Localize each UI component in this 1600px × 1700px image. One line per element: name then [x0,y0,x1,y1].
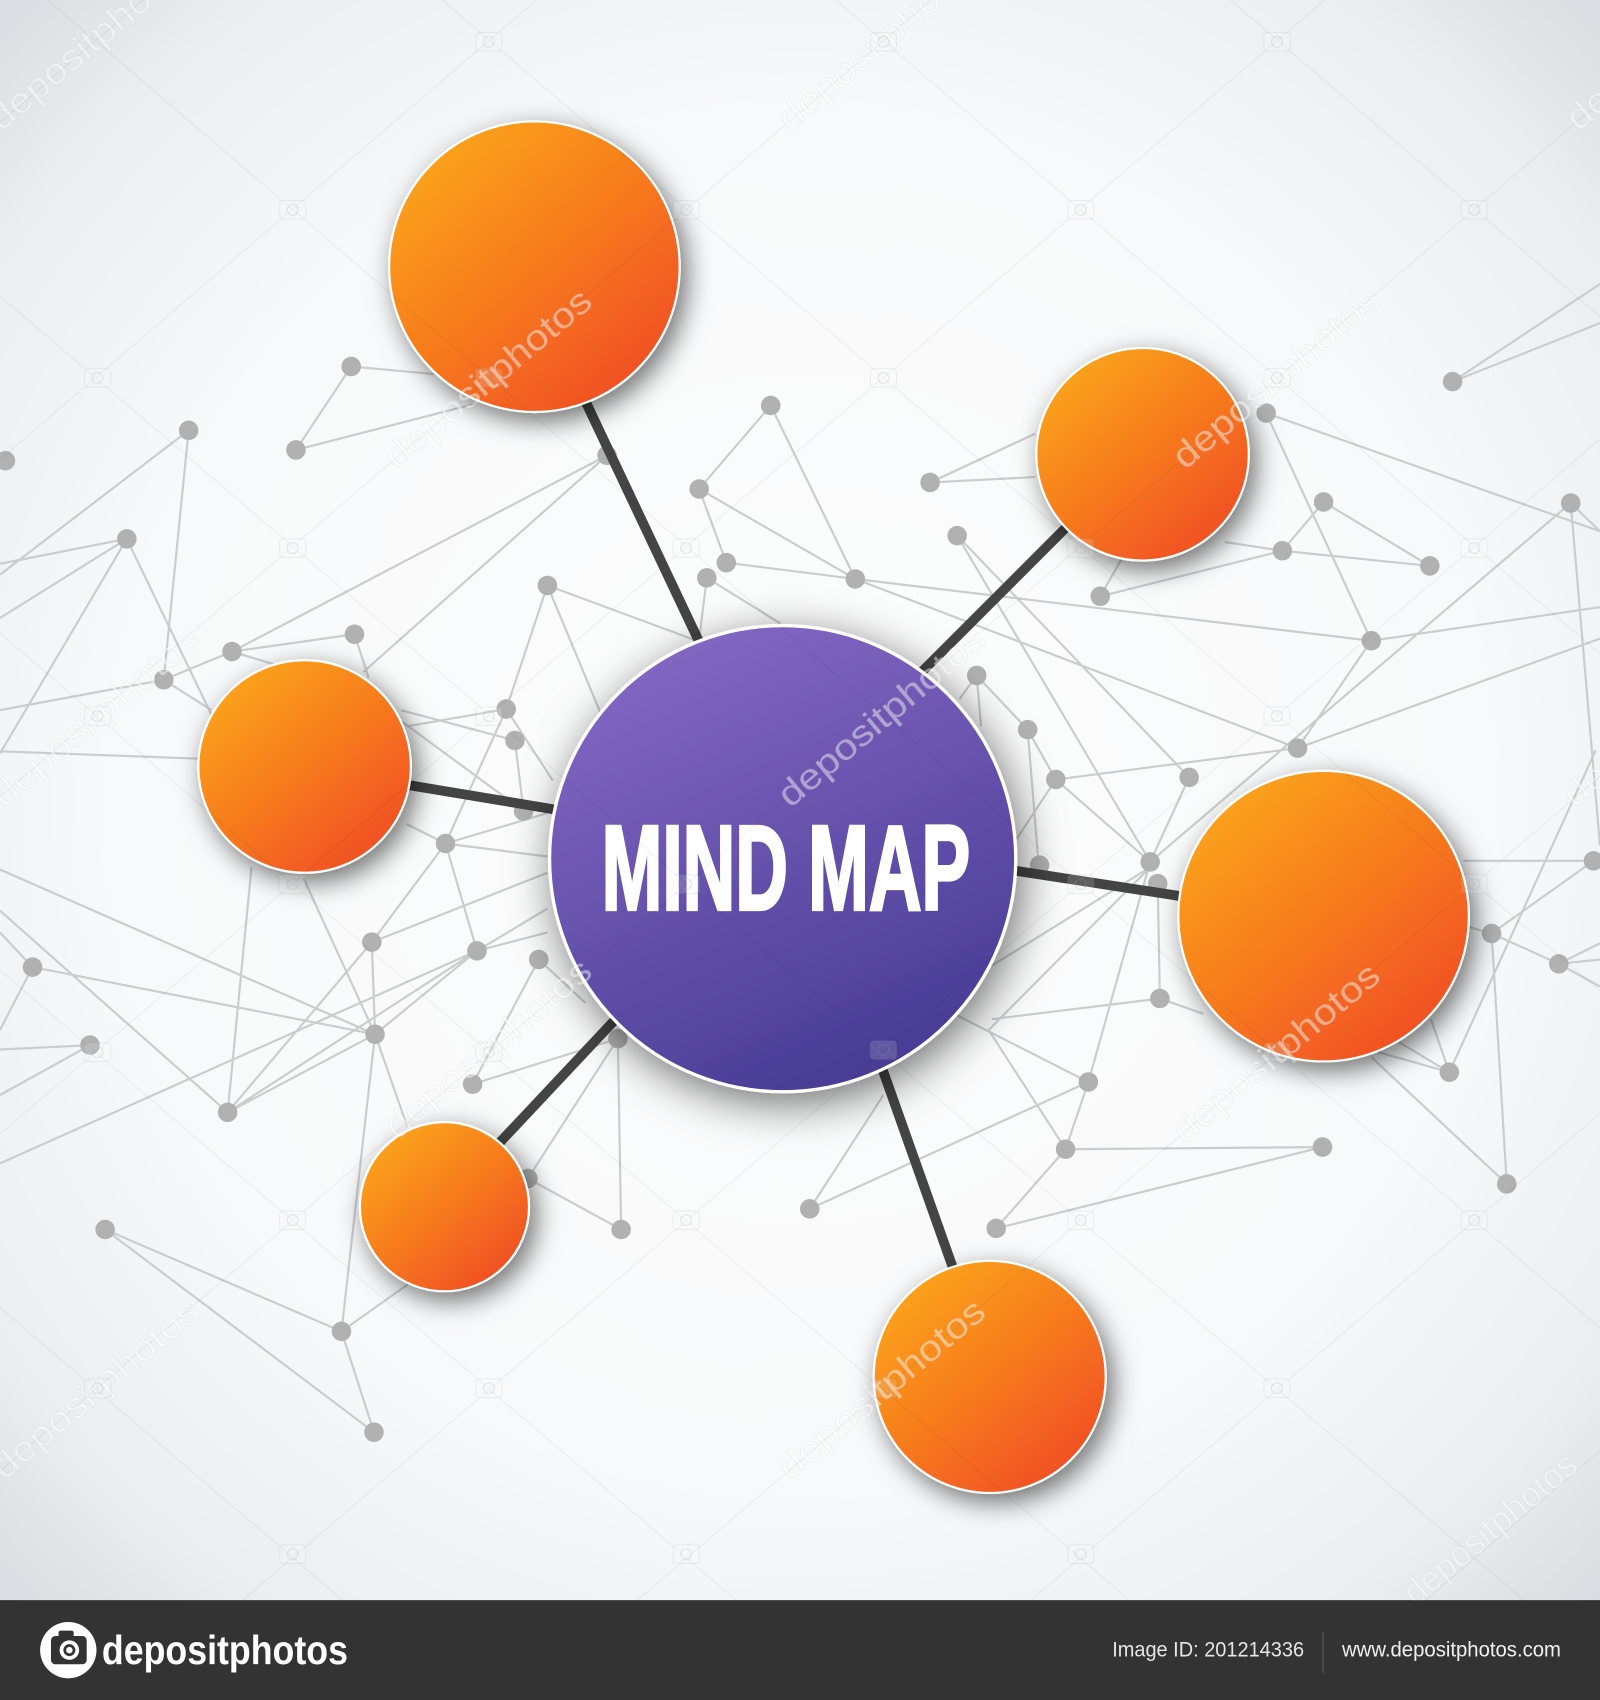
watermark camera icons [85,33,1487,1563]
central title: MIND MAP [602,802,970,936]
orange circle: upper right [1036,348,1249,561]
watermark text pattern: depositphotos [1164,280,1388,477]
watermark text pattern: depositphotos [770,1291,993,1487]
image id text: Image ID: 201214336 [1112,1637,1304,1662]
orange circle: lower left [360,1122,529,1291]
website text: www.depositphotos.com [1341,1637,1561,1662]
watermark text pattern: depositphotos [376,280,600,477]
footer divider [1322,1632,1324,1673]
orange circle: bottom [874,1261,1106,1493]
watermark text pattern: depositphotos [1164,955,1388,1151]
watermark text pattern: depositphotos [1395,1444,1585,1613]
footer bar [0,1600,1600,1700]
orange circle: right [1178,771,1469,1061]
orange circle: left [198,660,411,873]
icon: footer logo camera [40,1622,96,1678]
dark connectors between center and satellites [408,401,1184,1271]
orange circle: top [389,121,680,412]
footer logo wordmark: depositphotos [102,1627,348,1673]
watermark text pattern: depositphotos [376,950,600,1147]
central purple circle [550,626,1016,1092]
network of grey lines [0,284,1600,1432]
watermark text pattern: depositphotos [770,618,993,815]
network of grey nodes [0,357,1600,1442]
